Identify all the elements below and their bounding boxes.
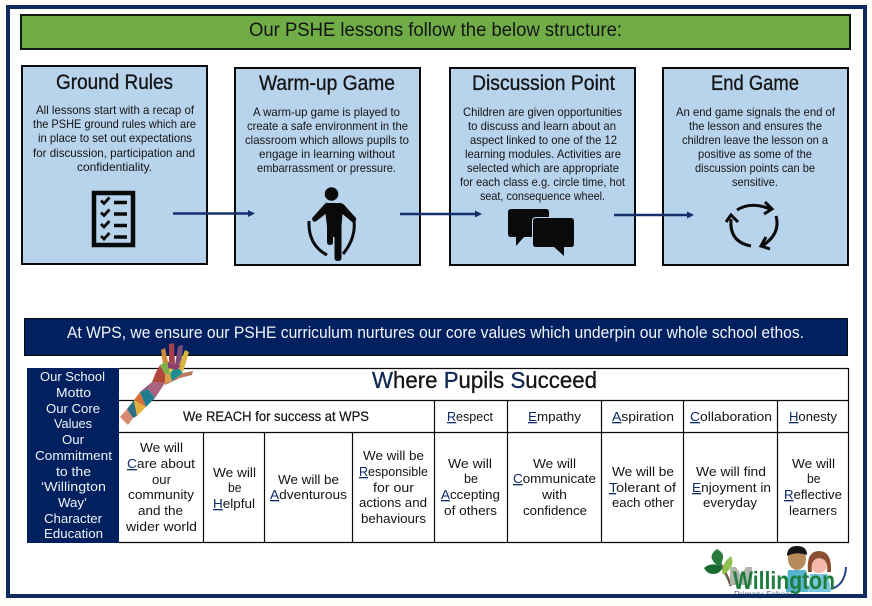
text: Ground Rules description: for discussion, participation and (33, 146, 195, 160)
commitment: enjoyment: We will find (696, 464, 766, 479)
table: values and commitments (27, 367, 849, 543)
icon: checklist (94, 193, 133, 245)
commitment: reflective (784, 456, 842, 518)
values banner: At WPS, we ensure our PSHE curriculum nurtures our core values which underpin our whole school ethos. (67, 324, 804, 342)
heading: Ground Rules: Ground Rules (56, 71, 173, 94)
icon: cycle arrows (726, 202, 777, 249)
text: End Game description (676, 105, 836, 189)
text: End Game description: An end game signals the end of (676, 105, 836, 119)
text: Warm-up Game description: classroom which allows pupils to (245, 133, 409, 147)
panel: Warm-up Game (235, 68, 420, 265)
text: Discussion Point description (460, 105, 626, 203)
table row labels column: Commitment (35, 448, 112, 463)
commitment: accepting: We will (448, 456, 492, 471)
heading: End Game: End Game (711, 72, 799, 95)
title banner (21, 15, 850, 49)
table row labels column: Motto (56, 385, 91, 400)
text: Ground Rules description: the PSHE ground rules which are (33, 117, 196, 131)
table row labels column: Our Core (46, 401, 100, 416)
icon: speech bubbles (508, 209, 574, 256)
commitment: responsible: Responsible (359, 464, 428, 479)
text: Ground Rules description: in place to set out expectations (38, 131, 192, 145)
commitment: communicate: We will (533, 456, 576, 471)
commitment: enjoyment: everyday (703, 495, 758, 510)
core values row: Respect (447, 409, 493, 424)
core values row: We REACH for success at WPS (183, 408, 369, 424)
commitment: accepting: of others (444, 503, 498, 518)
logo: Willington Primary School: Willington (733, 567, 835, 595)
logo: Willington Primary School (704, 546, 846, 599)
core values row: Aspiration (612, 409, 674, 424)
text: Warm-up Game description: A warm-up game is played to (253, 105, 400, 119)
commitment: helpful: be (228, 480, 242, 495)
text: Discussion Point description: to discuss and learn about an (468, 119, 616, 133)
commitment: enjoyment: Enjoyment in (692, 480, 771, 495)
commitment: responsible: behaviours (361, 511, 426, 526)
core values row: Empathy (528, 409, 582, 424)
heading: Discussion Point: Discussion Point (472, 72, 615, 95)
commitment: helpful: We will (213, 465, 256, 480)
commitment: communicate: confidence (523, 503, 587, 518)
text: End Game description: discussion points can be (695, 161, 815, 175)
arrow: Discussion Point to End Game (614, 212, 694, 218)
commitment: enjoyment (692, 464, 771, 510)
text: Warm-up Game description (245, 105, 409, 175)
text: End Game description: children leave the lesson on a (682, 133, 828, 147)
title banner: Our PSHE lessons follow the below structure: (249, 20, 622, 41)
panel: Ground Rules (22, 66, 207, 264)
arrow: Ground Rules to Warm-up Game (173, 210, 255, 217)
table row labels column: to the (56, 464, 91, 479)
commitment: accepting (441, 456, 500, 518)
commitment: responsible (359, 448, 428, 526)
commitment: care: and the (138, 503, 183, 518)
commitment: care: community (128, 487, 195, 502)
core values row: Collaboration (690, 409, 772, 424)
commitment: responsible: We will be (363, 448, 424, 463)
commitment: tolerant (609, 464, 676, 510)
table row labels column (27, 368, 119, 543)
commitment: adventurous: Adventurous (270, 487, 348, 502)
core values row (183, 408, 837, 424)
commitment: reflective: learners (789, 503, 838, 518)
panel: Discussion Point (450, 68, 635, 265)
commitment: adventurous (270, 472, 348, 502)
logo: Willington Primary School: Primary School (734, 590, 792, 599)
text: Discussion Point description: selected which are appropriate (467, 161, 619, 175)
text: Ground Rules description: confidentiality. (77, 160, 152, 174)
icon: skipping figure (309, 187, 356, 261)
arrow: Warm-up Game to Discussion Point (400, 210, 482, 218)
text: End Game description: the lesson and ensures the (689, 119, 822, 133)
text: Warm-up Game description: engage in learning without (259, 147, 396, 161)
commitment: accepting: Accepting (441, 487, 500, 502)
commitment: communicate (513, 456, 596, 518)
icon: mosaic reaching hand (120, 343, 193, 425)
commitment: responsible: for our (373, 480, 415, 495)
commitment: helpful: Helpful (213, 496, 255, 511)
commitment: communicate: with (541, 487, 567, 502)
core values row: Honesty (789, 409, 837, 424)
commitment: tolerant: each other (612, 495, 675, 510)
commitment: helpful (213, 465, 256, 511)
panel: End Game (663, 68, 848, 265)
commitment: care: Care about (127, 456, 195, 471)
text: Discussion Point description: for each class e.g. circle time, hot (460, 175, 626, 189)
commitment: responsible: actions and (359, 495, 427, 510)
commitment: adventurous: We will be (278, 472, 339, 487)
table row labels column: Values (54, 416, 92, 431)
values banner (24, 318, 848, 356)
text: Warm-up Game description: create a safe environment in the (247, 119, 408, 133)
table row labels column: Way’ (58, 495, 87, 510)
commitment: tolerant: We will be (612, 464, 674, 479)
table row labels column: Character (44, 511, 103, 526)
motto: Where Pupils Succeed (372, 367, 597, 393)
commitment: reflective: Reflective (784, 487, 842, 502)
table row labels column: Our (62, 432, 85, 447)
commitment: care (125, 440, 197, 534)
table row labels column: Our School (40, 369, 105, 384)
commitment: care: wider world (125, 519, 197, 534)
text: Discussion Point description: seat, consequence wheel. (480, 189, 605, 203)
commitment: reflective: be (807, 471, 820, 486)
text: End Game description: positive as some of the (698, 147, 812, 161)
text: End Game description: sensitive. (732, 175, 778, 189)
text: Discussion Point description: aspect linked to one of the 12 (470, 133, 617, 147)
text: Discussion Point description: Children are given opportunities (463, 105, 622, 119)
table row labels column: Education (44, 526, 103, 541)
commitment: communicate: Communicate (513, 471, 596, 486)
heading: Warm-up Game: Warm-up Game (259, 72, 395, 95)
commitment: care: We will (140, 440, 183, 455)
commitment: care: our (152, 472, 172, 487)
text: Ground Rules description: All lessons start with a recap of (36, 103, 195, 117)
text: Warm-up Game description: embarrassment or pressure. (257, 161, 396, 175)
commitment: accepting: be (464, 471, 478, 486)
table row labels column: ‘Willington (41, 479, 106, 494)
commitment: reflective: We will (792, 456, 835, 471)
text: Discussion Point description: learning modules. Activities are (465, 147, 621, 161)
text: Ground Rules description (33, 103, 196, 174)
commitment: tolerant: Tolerant of (609, 480, 676, 495)
